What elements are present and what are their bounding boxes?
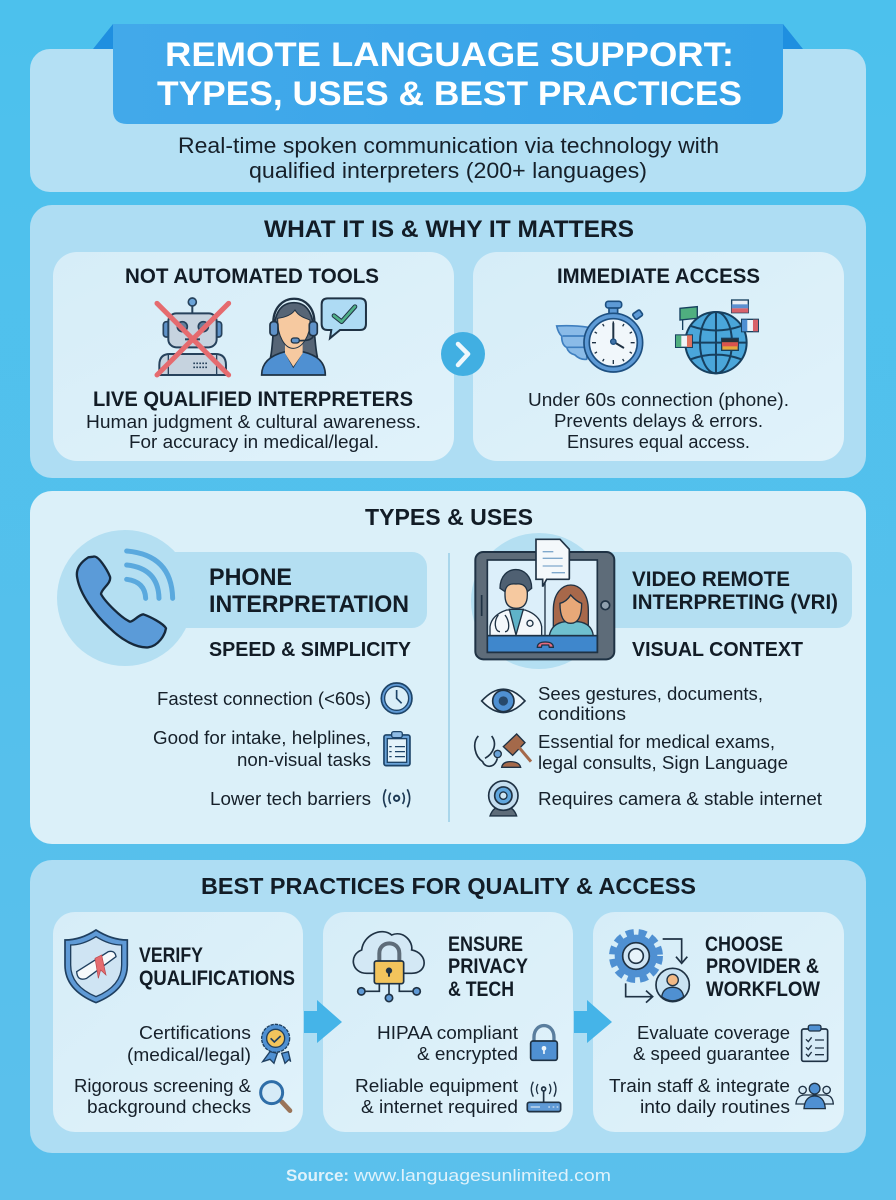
- phone header tab: [57, 530, 427, 666]
- icon: clock: [381, 683, 412, 714]
- item: lower tech barriers: Lower tech barriers: [210, 788, 371, 809]
- icon: team: [796, 1083, 833, 1109]
- card: immediate access: [473, 252, 844, 461]
- video heading: VIDEO REMOTE: [632, 567, 790, 591]
- item: certifications: (medical/legal): [127, 1044, 251, 1065]
- item: train staff: into daily routines: [640, 1096, 790, 1117]
- icon: phone handset with waves: [77, 551, 173, 647]
- item: sees gestures: Sees gestures, documents,: [538, 683, 763, 704]
- heading: what it is: WHAT IT IS & WHY IT MATTERS: [264, 216, 634, 243]
- card heading: [705, 933, 820, 1001]
- item: essential for exams: Essential for medical exams,: [538, 731, 775, 752]
- item: evaluate coverage: [633, 1022, 828, 1064]
- item: reliable equipment: Reliable equipment: [355, 1075, 518, 1096]
- title: TYPES, USES & BEST PRACTICES: [157, 75, 742, 113]
- item: requires camera: Requires camera & stable internet: [538, 788, 822, 809]
- source footer: [286, 1166, 611, 1185]
- item: good for intake: non-visual tasks: [237, 749, 371, 770]
- item: fastest connection: Fastest connection (<60s): [157, 688, 371, 709]
- card heading: CHOOSE: [705, 933, 783, 956]
- video heading: INTERPRETING (VRI): [632, 590, 838, 614]
- live interpreters text: For accuracy in medical/legal.: [129, 431, 379, 452]
- card heading: VERIFY: [139, 944, 203, 967]
- title: [157, 36, 742, 113]
- icon: webcam: [489, 781, 518, 816]
- video remote interpreting column: [471, 533, 852, 816]
- card heading: ENSURE: [448, 933, 523, 956]
- item: good for intake: Good for intake, helplines,: [153, 727, 371, 748]
- icon: clipboard: [384, 732, 410, 766]
- item: hipaa: HIPAA compliant: [377, 1022, 518, 1043]
- card heading: & TECH: [448, 978, 514, 1001]
- icon: checklist: [802, 1025, 828, 1061]
- item: hipaa: & encrypted: [417, 1043, 518, 1064]
- item: reliable equipment: & internet required: [361, 1096, 518, 1117]
- video subheading: VISUAL CONTEXT: [632, 639, 803, 661]
- item: train staff: [609, 1075, 833, 1117]
- phone interpretation column: [57, 530, 427, 809]
- item: rigorous screening: [74, 1075, 290, 1117]
- phone subheading: SPEED & SIMPLICITY: [209, 639, 412, 661]
- item: fastest connection: [157, 683, 412, 714]
- phone heading: PHONE: [209, 564, 292, 591]
- item: essential for exams: [475, 731, 788, 773]
- icon: router: [527, 1082, 561, 1112]
- card heading: QUALIFICATIONS: [139, 967, 295, 990]
- icon: award ribbon: [262, 1024, 291, 1063]
- icon: live interpreter with headset: [262, 298, 366, 375]
- card: ensure privacy and tech: [323, 912, 573, 1132]
- panel: types and uses: [30, 491, 866, 844]
- icon: cloud with padlock: [353, 932, 424, 1002]
- immediate access text: Under 60s connection (phone).: [528, 389, 789, 410]
- arrow: step two to three: [574, 1000, 612, 1043]
- video heading: [632, 567, 838, 614]
- icon: gear workflow with person: [612, 932, 689, 1003]
- immediate access text: Prevents delays & errors.: [554, 410, 763, 431]
- heading: best practices: BEST PRACTICES FOR QUALITY & ACCESS: [201, 873, 696, 899]
- item: sees gestures: [482, 683, 763, 724]
- immediate access text: Ensures equal access.: [567, 431, 750, 452]
- live interpreters text: Human judgment & cultural awareness.: [86, 411, 421, 432]
- item: rigorous screening: background checks: [87, 1096, 251, 1117]
- arrow: step one to two: [304, 1000, 342, 1043]
- item: certifications: Certifications: [139, 1022, 251, 1043]
- icon: tablet video call: [475, 539, 614, 659]
- card: verify qualifications: [53, 912, 303, 1132]
- icon: magnifier: [261, 1082, 290, 1111]
- card heading: PRIVACY: [448, 955, 528, 978]
- source footer: Source:: [286, 1166, 349, 1185]
- item: certifications: [127, 1022, 291, 1065]
- item: sees gestures: conditions: [538, 703, 626, 724]
- icon: stethoscope and gavel: [475, 734, 531, 767]
- header panel: [30, 24, 866, 192]
- card heading: [139, 944, 295, 990]
- icon: padlock: [531, 1026, 557, 1060]
- item: essential for exams: legal consults, Sign Language: [538, 752, 788, 773]
- card heading: WORKFLOW: [706, 978, 820, 1001]
- subtitle: qualified interpreters (200+ languages): [249, 158, 647, 183]
- item: rigorous screening: Rigorous screening &: [74, 1075, 252, 1096]
- icon: eye: [482, 689, 525, 712]
- immediate access text: [528, 389, 789, 452]
- live interpreters text: LIVE QUALIFIED INTERPRETERS: [93, 387, 413, 411]
- item: train staff: Train staff & integrate: [609, 1075, 790, 1096]
- subtitle: [178, 133, 719, 183]
- icon: winged stopwatch: [557, 301, 643, 372]
- icon: signal: [384, 789, 410, 807]
- phone heading: INTERPRETATION: [209, 591, 409, 618]
- card heading: [448, 933, 528, 1001]
- icon: globe with flags: [676, 300, 758, 373]
- subtitle: Real-time spoken communication via technology with: [178, 133, 719, 158]
- item: reliable equipment: [355, 1075, 561, 1117]
- item: evaluate coverage: & speed guarantee: [633, 1043, 790, 1064]
- card: choose provider and workflow: [593, 912, 844, 1132]
- card: not automated tools: [53, 252, 454, 461]
- card heading: PROVIDER &: [706, 955, 819, 978]
- title: REMOTE LANGUAGE SUPPORT:: [165, 36, 734, 74]
- source footer: www.languagesunlimited.com: [353, 1166, 611, 1185]
- card heading: IMMEDIATE ACCESS: [557, 265, 760, 288]
- panel: what it is and why it matters: [30, 205, 866, 478]
- phone heading: [209, 564, 409, 618]
- panel: best practices: [30, 860, 866, 1153]
- item: hipaa: [377, 1022, 557, 1064]
- item: requires camera: [489, 781, 822, 816]
- heading: types and uses: TYPES & USES: [365, 504, 533, 530]
- video header tab: [471, 533, 852, 669]
- title ribbon: [93, 24, 803, 124]
- icon: crossed-out robot: [157, 298, 229, 375]
- icon: shield with diploma: [65, 930, 127, 1003]
- live interpreters text: [86, 387, 421, 452]
- card heading: NOT AUTOMATED TOOLS: [125, 265, 379, 288]
- arrow: next chevron: [441, 332, 485, 376]
- item: evaluate coverage: Evaluate coverage: [637, 1022, 790, 1043]
- item: good for intake: [153, 727, 410, 770]
